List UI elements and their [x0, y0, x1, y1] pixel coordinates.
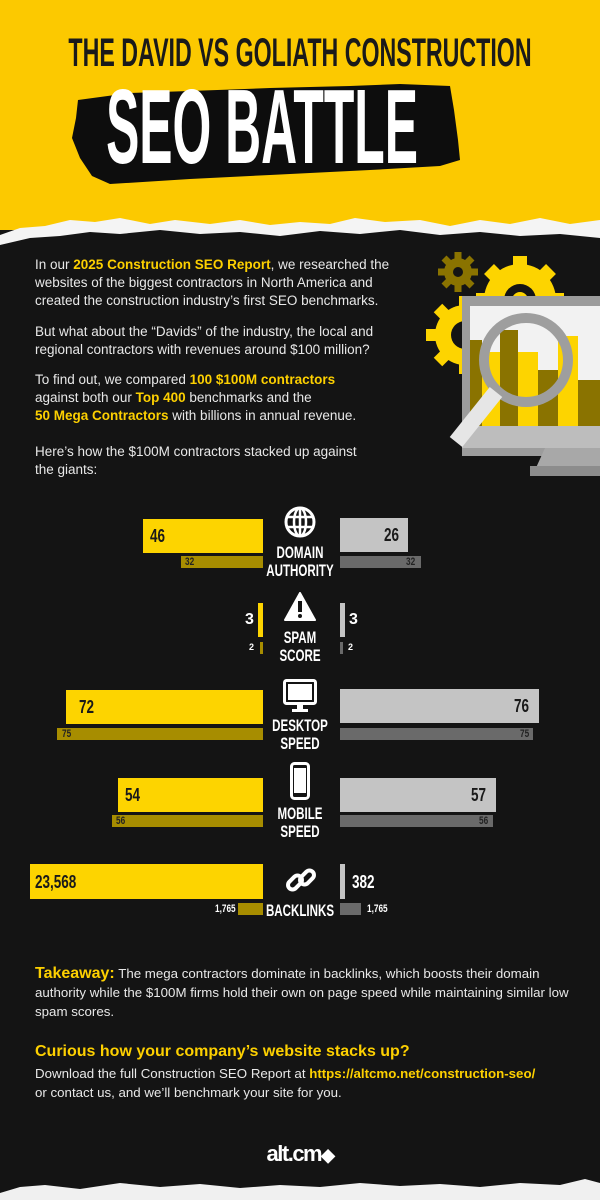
intro text: websites of the biggest contractors in North America and: [35, 275, 373, 290]
label: mobile speed: SPEED: [280, 822, 320, 841]
chart: desktop speed: 76: [514, 696, 529, 716]
bottom torn edge: [0, 1179, 600, 1200]
intro text: In our 2025 Construction SEO Report, we researched the: [35, 257, 389, 272]
chart: spam score: 2: [249, 642, 254, 652]
call to action text: [35, 1066, 536, 1100]
label: mobile speed: MOBILE: [278, 804, 322, 823]
label: domain authority: DOMAIN: [277, 543, 323, 562]
label: spam score: [279, 628, 321, 665]
icon: mobile phone: [290, 762, 310, 800]
chart: domain authority: 26: [384, 525, 399, 545]
chart: desktop speed: 75: [520, 728, 529, 740]
chart: mobile speed: 56: [479, 815, 488, 827]
title: THE DAVID VS GOLIATH CONSTRUCTION: [68, 31, 532, 75]
chart: spam score: [245, 603, 358, 654]
label: spam score: SPAM: [284, 628, 316, 647]
takeaway text: Takeaway: The mega contractors dominate in backlinks, which boosts their domain authority while the $100M firms hold their own on page speed while maintaining similar low spam scores.: [35, 965, 569, 1019]
chart: mobile speed: 54: [125, 785, 140, 805]
brush stroke: [72, 84, 460, 184]
chart: mobile speed: 56: [116, 815, 125, 827]
label: domain authority: AUTHORITY: [266, 561, 334, 580]
icon: desktop: [283, 679, 317, 712]
header yellow band: [0, 0, 600, 230]
chart: backlinks: 1,765: [367, 903, 388, 915]
title: [68, 31, 532, 186]
title: SEO BATTLE: [106, 68, 418, 186]
chart: spam score: 2: [348, 642, 353, 652]
label: backlinks: BACKLINKS: [266, 901, 334, 920]
label: desktop speed: [272, 716, 328, 753]
icon: chain link: [286, 868, 316, 892]
chart: desktop speed: 72: [79, 697, 94, 717]
chart: domain authority: 46: [150, 526, 165, 546]
icon: warning: [284, 592, 316, 621]
chart: domain authority: 32: [185, 556, 194, 568]
text: But what about the “Davids” of the industry, the local and: [35, 324, 373, 339]
chart: desktop speed: [57, 689, 539, 740]
chart: domain authority: [143, 518, 421, 568]
text: Here’s how the $100M contractors stacked up against: [35, 444, 357, 459]
intro text: [35, 257, 389, 308]
chart: backlinks: 23,568: [35, 872, 76, 892]
text: 50 Mega Contractors with billions in annual revenue.: [35, 408, 356, 423]
illustration: gears and monitor: [426, 252, 600, 476]
call to action text: Download the full Construction SEO Report at https://altcmo.net/construction-seo/: [35, 1066, 535, 1081]
chart: spam score: 3: [349, 611, 358, 628]
label: domain authority: [266, 543, 334, 580]
label: desktop speed: DESKTOP: [272, 716, 328, 735]
logo: alt.cm◆: [267, 1141, 333, 1166]
chart: mobile speed: [112, 778, 496, 827]
text: To find out, we compared 100 $100M contractors: [35, 372, 335, 387]
chart: backlinks: [30, 864, 388, 915]
call to action text: or contact us, and we’ll benchmark your site for you.: [35, 1085, 342, 1100]
text: regional contractors with revenues around $100 million?: [35, 342, 370, 357]
torn paper edge: [0, 218, 600, 245]
chart: spam score: 3: [245, 611, 254, 628]
chart: backlinks: 1,765: [215, 903, 236, 915]
call to action heading: Curious how your company’s website stacks up?: [35, 1043, 410, 1060]
chart: domain authority: 32: [406, 556, 415, 568]
text: the giants:: [35, 462, 97, 477]
label: spam score: SCORE: [279, 646, 321, 665]
label: mobile speed: [278, 804, 322, 841]
intro text: created the construction industry’s first SEO benchmarks.: [35, 293, 378, 308]
chart: mobile speed: 57: [471, 785, 486, 805]
text: against both our Top 400 benchmarks and the: [35, 390, 312, 405]
label: desktop speed: SPEED: [280, 734, 320, 753]
icon: globe: [284, 506, 316, 538]
chart: backlinks: 382: [352, 872, 375, 892]
chart: desktop speed: 75: [62, 728, 71, 740]
